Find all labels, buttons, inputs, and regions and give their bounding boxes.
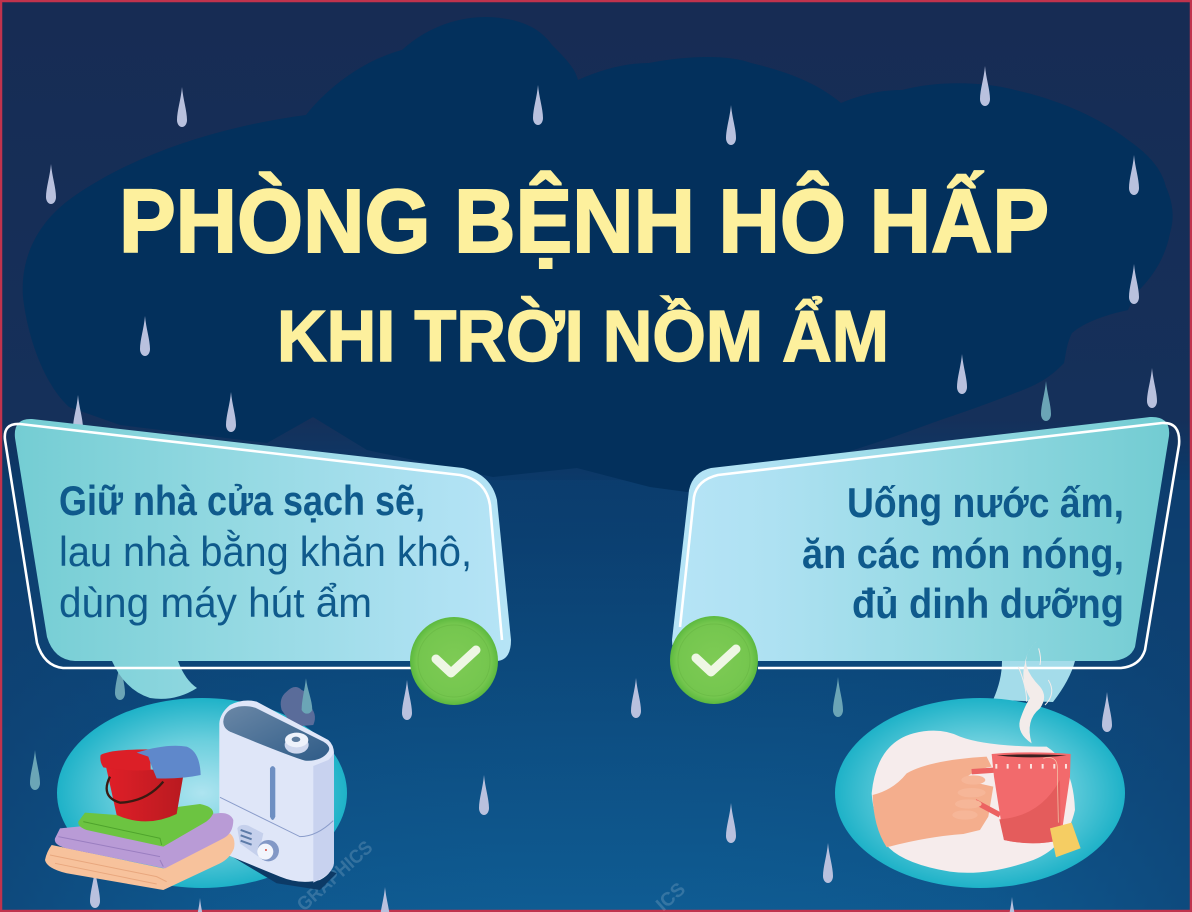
- steam: [1018, 641, 1052, 743]
- hand: [873, 757, 993, 847]
- teal drop over smoke: [302, 678, 312, 714]
- right illustration backdrop: [835, 698, 1125, 888]
- right bubble text: [802, 479, 1124, 627]
- title: PHÒNG BỆNH HÔ HẤP: [119, 170, 1049, 272]
- right bubble text: Uống nước ấm,: [847, 479, 1124, 526]
- dark cloud: [23, 17, 1173, 492]
- panel: left speech bubble: [5, 419, 511, 699]
- left illustration backdrop: [57, 698, 347, 888]
- humidifier: [219, 701, 337, 890]
- left bubble text: lau nhà bằng khăn khô,: [59, 528, 472, 575]
- illustration: hand holding hot tea mug: [872, 641, 1081, 873]
- panel: right speech bubble: [672, 417, 1179, 702]
- watermark: [293, 837, 690, 912]
- teal raindrops: [30, 381, 1051, 790]
- illustration: humidifier, bucket and towels: [45, 678, 337, 890]
- tea bag: [1043, 758, 1081, 857]
- humidifier smoke: [281, 687, 315, 727]
- bucket: [100, 746, 201, 821]
- fingers: [952, 775, 986, 820]
- title: [119, 170, 1049, 377]
- left bubble text: Giữ nhà cửa sạch sẽ,: [59, 477, 425, 524]
- icon: right green check: [670, 616, 758, 704]
- white backdrop: [872, 731, 1075, 873]
- left bubble text: [59, 477, 472, 626]
- icon: left green check: [410, 617, 498, 705]
- right bubble text: ăn các món nóng,: [802, 530, 1124, 577]
- title: KHI TRỜI NỒM ẨM: [277, 296, 889, 377]
- mug: [972, 752, 1071, 843]
- left bubble text: dùng máy hút ẩm: [59, 579, 372, 626]
- towels: [45, 804, 234, 890]
- right bubble text: đủ dinh dưỡng: [852, 580, 1124, 627]
